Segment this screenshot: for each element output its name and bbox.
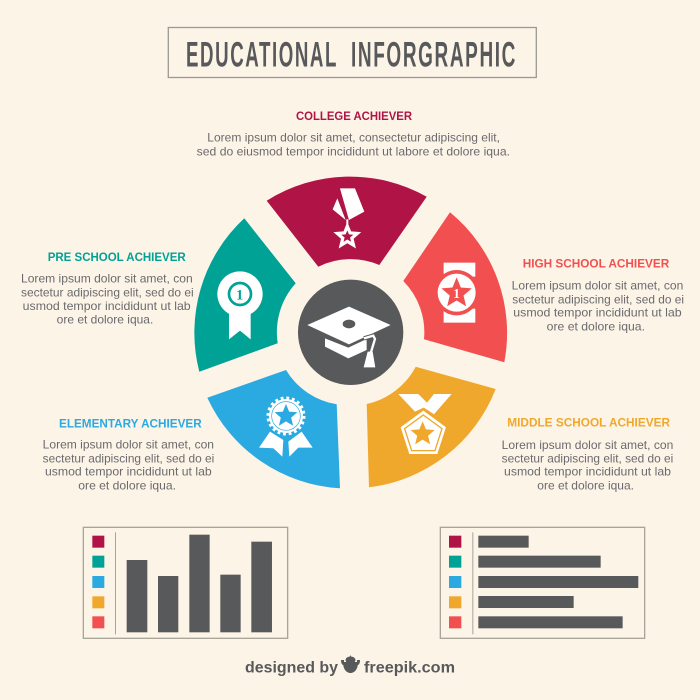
text block: pre school achiever: sectetur adipiscing elit, sed do ei [21, 286, 194, 299]
segment: college (crimson) [267, 177, 427, 267]
text block: elementary achiever: Lorem ipsum dolor sit amet, con [43, 438, 214, 451]
icon: red badge with star: 1 [453, 286, 460, 301]
text block: high school achiever: Lorem ipsum dolor sit amet, con [512, 279, 683, 292]
title: EDUCATIONAL [186, 36, 338, 74]
bars [127, 535, 272, 632]
text block: elementary achiever: ELEMENTARY ACHIEVER [59, 416, 202, 430]
bar chart: vertical [83, 527, 288, 638]
text block: elementary achiever: usmod tempor incididunt ut lab [45, 466, 212, 479]
text block: pre school achiever: ore et dolore iqua. [57, 314, 153, 326]
text block: pre school achiever: PRE SCHOOL ACHIEVER [48, 250, 186, 264]
text block: middle school achiever: MIDDLE SCHOOL ACHIEVER [507, 416, 670, 430]
text block: high school achiever: usmod tempor incididunt ut lab [513, 307, 682, 320]
legend squares [449, 536, 461, 628]
text block: middle school achiever: ore et dolore iqua. [537, 480, 634, 492]
icon: freepik logo [341, 655, 360, 673]
text block: college achiever [197, 109, 510, 159]
segment: elementary (blue) [207, 370, 340, 488]
text block: college achiever: sed do eiusmod tempor incididunt ut labore et dolore iqua. [197, 146, 510, 159]
text block: high school achiever: HIGH SCHOOL ACHIEVER [523, 257, 669, 271]
icon: teal ribbon badge [217, 271, 263, 339]
text block: high school achiever: ore et dolore iqua. [547, 320, 645, 333]
segment: pre school (teal) [194, 218, 296, 372]
text block: middle school achiever [502, 416, 673, 492]
icon: orange pentagon medal [398, 394, 452, 454]
icon: blue rosette [259, 398, 313, 457]
icon: red badge with star [434, 263, 479, 323]
footer: designed by freepik.com [245, 655, 455, 676]
text block: high school achiever: sectetur adipiscing elit, sed do ei [512, 293, 684, 306]
text block: elementary achiever [43, 416, 214, 492]
text block: middle school achiever: Lorem ipsum dolor sit amet, con [502, 439, 673, 452]
bar chart: horizontal [440, 527, 645, 638]
text block: high school achiever [512, 257, 684, 333]
legend squares [92, 536, 104, 628]
icon: crimson medal with star [333, 188, 364, 249]
icon: teal ribbon badge: 1 [236, 287, 243, 303]
segment: middle school (orange) [367, 367, 496, 487]
text block: college achiever: COLLEGE ACHIEVER [296, 109, 412, 123]
text block: college achiever: Lorem ipsum dolor sit amet, consectetur adipiscing elit, [207, 132, 500, 145]
text block: pre school achiever: usmod tempor incididunt ut lab [23, 300, 191, 313]
icon: graduation cap in dark circle [298, 280, 403, 385]
bars [478, 536, 638, 628]
title: INFORGRAPHIC [351, 36, 517, 74]
segment: high school (red) [403, 212, 507, 362]
text block: pre school achiever: Lorem ipsum dolor sit amet, con [21, 273, 193, 286]
text block: pre school achiever [21, 250, 194, 326]
text block: middle school achiever: sectetur adipiscing elit, sed do ei [502, 452, 673, 465]
text block: middle school achiever: usmod tempor incididunt ut lab [504, 466, 671, 479]
text block: elementary achiever: sectetur adipiscing elit, sed do ei [43, 452, 214, 465]
title box [168, 28, 536, 78]
footer: designed by freepik.com: designed by [245, 660, 338, 676]
text block: elementary achiever: ore et dolore iqua. [78, 480, 176, 492]
footer: designed by freepik.com: freepik.com [364, 660, 455, 676]
